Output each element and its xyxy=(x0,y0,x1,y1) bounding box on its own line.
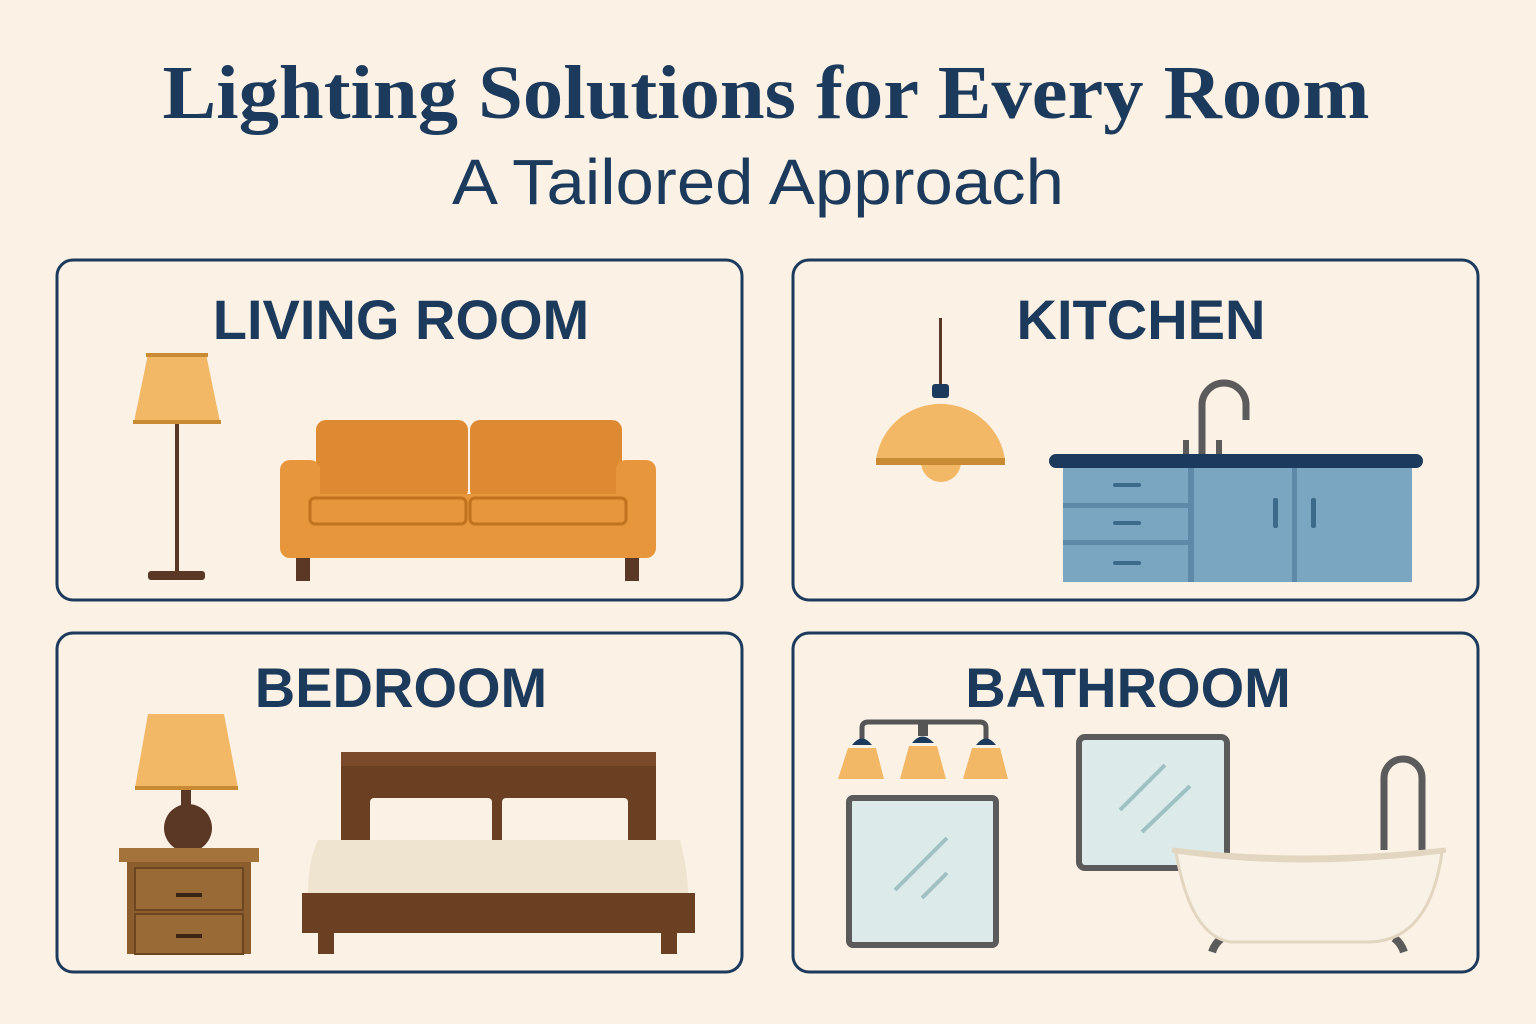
icon: floor lamp xyxy=(133,353,221,580)
icon: bathtub xyxy=(1172,759,1446,952)
heading: kitchen: KITCHEN xyxy=(1017,288,1265,351)
panel: kitchen xyxy=(793,260,1478,600)
icon: nightstand with lamp xyxy=(119,714,259,954)
icon: mirror right xyxy=(1079,737,1227,868)
title: Lighting Solutions for Every Room xyxy=(162,51,1370,135)
subtitle: A Tailored Approach xyxy=(452,146,1064,218)
heading: bathroom: BATHROOM xyxy=(965,656,1291,719)
icon: sofa xyxy=(280,420,656,581)
panel: bedroom xyxy=(57,633,742,972)
panel: bathroom xyxy=(793,633,1478,972)
icon: bed xyxy=(302,752,695,954)
panel: living room xyxy=(57,260,742,600)
heading: bedroom: BEDROOM xyxy=(255,656,547,719)
icon: pendant lamp xyxy=(876,318,1005,482)
icon: kitchen counter xyxy=(1049,383,1423,582)
icon: vanity light xyxy=(838,722,1008,779)
icon: mirror left xyxy=(849,798,996,945)
heading: living room: LIVING ROOM xyxy=(213,288,589,351)
